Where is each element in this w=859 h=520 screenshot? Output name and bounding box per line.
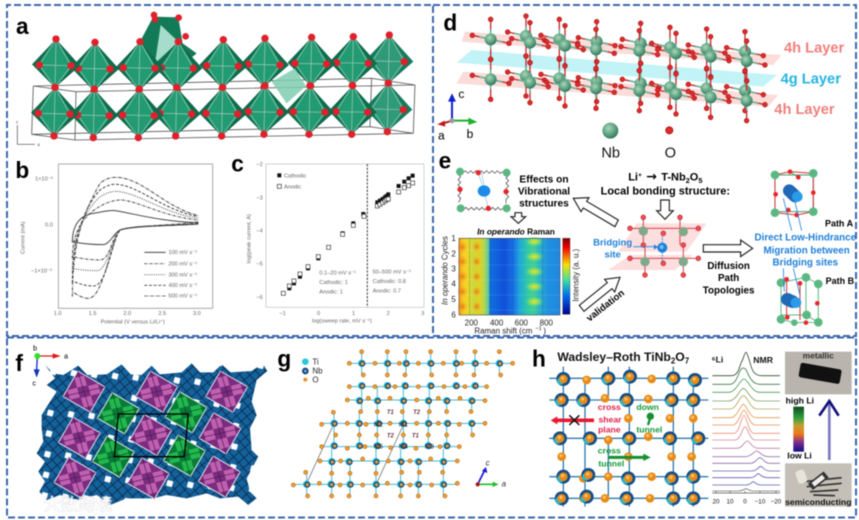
axis triad b a c	[32, 343, 69, 388]
axis a, c: a	[37, 142, 40, 147]
text: Li+ local bonding structure: 2	[686, 176, 690, 185]
panel d: T-Nb2O5 layered structure: d	[443, 10, 457, 36]
legend: Nb and O atoms: O	[665, 145, 676, 161]
b axis labels: 1×10⁻³	[35, 177, 53, 183]
back wireframe	[32, 78, 415, 140]
text: effects on vibrational structures	[518, 175, 570, 210]
colour bar: high Li to low Li: high Li	[786, 395, 814, 405]
panel c: log peak current scatter chart: c	[231, 150, 244, 176]
blue guide arrows	[783, 198, 802, 295]
b axis labels: 1.5	[89, 311, 97, 317]
photo: metallic	[785, 350, 852, 394]
unit cell outline	[114, 414, 188, 457]
axis triad: a	[438, 128, 445, 142]
heatmap: in operando Raman: 200	[465, 318, 479, 327]
axis triad: c	[458, 87, 464, 101]
NMR labels: 10	[726, 498, 734, 505]
heatmap: in operando Raman	[440, 226, 581, 335]
axis triad	[437, 87, 477, 142]
heatmap: in operando Raman: In operando Cycles	[440, 236, 449, 305]
text: Li+ local bonding structure: →	[642, 169, 661, 184]
b legend: 200 mV s⁻¹	[168, 261, 197, 267]
text: validation: validation	[585, 288, 627, 324]
axis triad b a c: c	[32, 379, 36, 388]
cross tunnel arrow	[608, 454, 651, 461]
c labels: Anodic: 1	[319, 289, 343, 295]
b axis labels: 3.0	[193, 311, 201, 317]
translucent octahedron	[272, 68, 306, 103]
local bonding structure with bridging site: Bridging	[593, 237, 632, 248]
text: diffusion path topologies: Diffusion	[707, 261, 750, 272]
legend Ti Nb O	[302, 357, 323, 384]
text: Li+ local bonding structure: Li	[628, 172, 638, 184]
b axis labels: 0.0	[45, 223, 53, 229]
b axis labels	[21, 177, 201, 326]
cube: path B	[777, 273, 855, 327]
colour bar: high Li to low Li	[786, 395, 814, 460]
title: 7	[685, 357, 690, 366]
vibrational spring box	[456, 168, 511, 212]
axis triad b a c: b	[33, 343, 37, 352]
c labels: 1	[352, 311, 355, 317]
text: effects on vibrational structures: Vibrational	[518, 187, 570, 198]
heatmap: in operando Raman: 3	[451, 265, 456, 274]
c labels: 0.1–20 mV s⁻¹	[319, 270, 356, 276]
photo: semiconducting	[785, 463, 852, 507]
panel a: octahedral crystal structure: a	[16, 13, 29, 39]
b axis labels: 2.0	[123, 311, 131, 317]
text: diffusion path topologies: Topologies	[703, 285, 755, 296]
down tunnel icon	[647, 413, 654, 425]
text: Li+ local bonding structure: +	[638, 172, 642, 179]
heatmap: in operando Raman: 600	[515, 318, 529, 327]
c labels: −3	[256, 195, 263, 201]
local bonding structure with bridging site: site	[604, 249, 621, 260]
green blocks	[92, 392, 207, 477]
site labels: M5	[374, 443, 383, 450]
site labels: M2	[374, 421, 383, 428]
metal atoms	[303, 360, 503, 488]
b legend: 500 mV s⁻¹	[168, 294, 197, 300]
cell outline	[307, 425, 403, 483]
text: diffusion path topologies	[703, 261, 755, 296]
panel b: cyclic voltammetry chart: b	[15, 157, 29, 183]
axis triad b a c: a	[64, 351, 69, 360]
c labels: −1	[279, 311, 286, 317]
legend: Nb and O atoms: Nb	[601, 145, 620, 161]
legend Ti Nb O: O	[312, 375, 319, 384]
NMR labels: ⁶Li	[712, 354, 723, 364]
legend: Nb and O atoms	[601, 123, 676, 161]
c labels: −2	[256, 162, 263, 168]
tunnel labels: down	[636, 402, 659, 412]
heatmap: in operando Raman: Intensity (a. u.)	[572, 249, 581, 302]
lattice bonds	[293, 351, 513, 496]
panel f: crystal block structure: f	[15, 350, 23, 376]
upper row of octahedra	[32, 31, 413, 95]
layer labels: 4g Layer	[781, 71, 841, 87]
panel: f, g, h dashed frame	[7, 338, 856, 518]
c labels: −5	[256, 262, 263, 268]
title: Wadsley–Roth TiNb	[557, 350, 671, 364]
panel: d, e dashed frame	[433, 5, 856, 336]
panel g: TiNb2O7 lattice: g	[277, 345, 291, 371]
c labels: Cathodic: 0.8	[373, 279, 406, 285]
NMR labels: NMR	[753, 355, 774, 365]
text: direct low-hindrance migration: Migration between	[763, 245, 850, 256]
c labels: −4	[256, 228, 263, 234]
cube: path A	[771, 169, 854, 229]
tunnel labels: tunnel	[598, 459, 624, 469]
b legend	[144, 250, 197, 300]
heatmap: in operando Raman: )	[543, 326, 546, 335]
panel a: octahedral crystal structure	[16, 12, 415, 147]
blue octahedra network	[37, 363, 267, 505]
axis a, c: c	[16, 119, 19, 124]
b axis labels: 2.5	[158, 311, 166, 317]
c labels: log(sweep rate, mV s⁻¹)	[312, 319, 372, 325]
axis a, c	[476, 459, 507, 489]
axis triad: b	[467, 127, 474, 141]
watermark: 大数跨境	[43, 495, 113, 515]
watermark	[12, 493, 113, 515]
c labels: Anodic: 0.7	[373, 288, 401, 294]
heatmap: in operando Raman: 2	[451, 250, 456, 259]
b legend: 300 mV s⁻¹	[168, 272, 197, 278]
6Li NMR spectra	[712, 352, 780, 493]
c labels: log(peak current, A)	[247, 214, 253, 263]
NMR labels: 0	[743, 498, 747, 505]
site labels: T1	[387, 410, 394, 416]
c labels: −6	[256, 295, 263, 301]
panel: a, b, c dashed frame	[7, 5, 431, 336]
NMR labels	[712, 354, 782, 505]
b axis labels: 1.0	[54, 311, 62, 317]
b axis labels: Current (mA)	[21, 221, 27, 254]
c labels: 50–500 mV s⁻¹	[373, 269, 411, 275]
b axis labels: Potential (V versus Li/Li⁺)	[101, 319, 165, 326]
NMR labels: −20	[771, 498, 782, 505]
cube: path A: Path A	[825, 219, 854, 229]
heatmap: in operando Raman: 4	[451, 280, 456, 289]
heatmap: in operando Raman: −1	[535, 326, 542, 332]
raised octahedron shard	[140, 12, 197, 68]
cathodic markers	[277, 173, 415, 295]
panel e: in operando Raman and diffusion schematic	[439, 147, 857, 335]
site labels: M1	[399, 421, 408, 428]
tunnel labels: cross	[598, 445, 621, 455]
c labels: 2	[387, 311, 390, 317]
c labels	[247, 162, 424, 325]
legend Ti Nb O: Nb	[312, 367, 323, 376]
c labels: Anodic	[284, 184, 301, 190]
heatmap: in operando Raman: 5	[451, 295, 456, 304]
panel h: Wadsley-Roth TiNb2O7: h	[532, 346, 546, 372]
blocked cross shear plane arrow	[551, 415, 594, 425]
text: direct low-hindrance migration: Direct Low-Hindrance	[755, 233, 857, 244]
lattice	[549, 367, 708, 507]
layer planes	[457, 32, 782, 107]
oxygen atoms	[293, 352, 513, 496]
text: Li+ local bonding structure: T-Nb	[661, 172, 686, 184]
title: O	[675, 350, 685, 364]
heatmap: in operando Raman: 800	[540, 318, 554, 327]
text: Li+ local bonding structure: Local bonding structure:	[601, 185, 730, 197]
b legend: 100 mV s⁻¹	[168, 250, 197, 256]
panel d: T-Nb2O5 layered structure	[437, 10, 845, 161]
photo: metallic: metallic	[803, 350, 834, 360]
hollow arrows	[511, 198, 753, 311]
b legend: 400 mV s⁻¹	[168, 283, 197, 289]
site labels	[374, 410, 434, 450]
title: 2	[671, 357, 676, 366]
text: Li+ local bonding structure: O	[690, 172, 699, 184]
c labels: 3	[421, 311, 424, 317]
c labels: Cathodic: 1	[319, 280, 348, 286]
upper Nb-O layer	[470, 14, 767, 83]
panel b: cyclic voltammetry chart	[15, 157, 213, 326]
text: Li+ local bonding structure: 5	[698, 176, 702, 185]
panel f: crystal block structure	[12, 343, 267, 515]
tunnel labels	[598, 402, 662, 469]
arrow: transition upward	[819, 401, 839, 460]
layer labels	[774, 41, 845, 118]
site labels: M3	[425, 443, 434, 450]
panel g: TiNb2O7 lattice	[277, 345, 513, 496]
tunnel labels: plane	[598, 424, 621, 434]
site labels: T2	[413, 410, 421, 416]
CV curves	[72, 177, 198, 298]
heatmap: in operando Raman: 400	[490, 318, 504, 327]
colour bar: high Li to low Li: low Li	[787, 450, 812, 460]
panel e: in operando Raman and diffusion schematic: e	[439, 147, 451, 173]
text: effects on vibrational structures: structures	[519, 199, 569, 210]
c labels: 0	[317, 311, 320, 317]
cube: path B: Path B	[826, 276, 855, 286]
site labels: T1	[412, 434, 419, 440]
heatmap: in operando Raman: 6	[451, 310, 456, 319]
c labels: Cathodic	[284, 173, 306, 179]
heatmap: in operando Raman: In operando Raman	[477, 226, 555, 236]
anodic markers	[277, 181, 415, 295]
b axis labels: −1×10⁻³	[31, 269, 52, 275]
local bonding structure with bridging site	[593, 215, 707, 277]
tunnel labels: tunnel	[636, 424, 662, 434]
text: direct low-hindrance migration: Bridging sites	[773, 257, 839, 268]
layer labels: 4h Layer	[774, 102, 835, 118]
panel c: log peak current scatter chart	[231, 150, 424, 325]
lower Nb-O layer	[470, 54, 767, 123]
layer labels: 4h Layer	[784, 41, 845, 57]
heatmap: in operando Raman: 1	[451, 234, 456, 243]
lower row of octahedra	[31, 79, 412, 141]
text: direct low-hindrance migration	[755, 233, 857, 268]
panel h: Wadsley-Roth TiNb2O7	[532, 346, 852, 507]
text: Li+ local bonding structure	[601, 169, 730, 197]
NMR labels: 20	[712, 498, 720, 505]
site labels: T2	[387, 434, 394, 440]
legend Ti Nb O: Ti	[312, 357, 319, 366]
photo: semiconducting: semiconducting	[785, 497, 851, 507]
purple blocks	[54, 371, 248, 499]
text: diffusion path topologies: Path	[718, 273, 739, 284]
site labels: M4	[399, 443, 408, 450]
tunnel labels: shear	[598, 414, 622, 424]
NMR labels: −10	[755, 498, 766, 505]
text: effects on vibrational structures: Effects on	[519, 175, 569, 186]
tunnel labels: cross	[598, 402, 621, 412]
axis a, c: a	[502, 480, 507, 489]
axis a, c	[16, 119, 40, 147]
axis a, c: c	[486, 459, 490, 468]
heatmap: in operando Raman: Raman shift (cm	[474, 326, 533, 335]
